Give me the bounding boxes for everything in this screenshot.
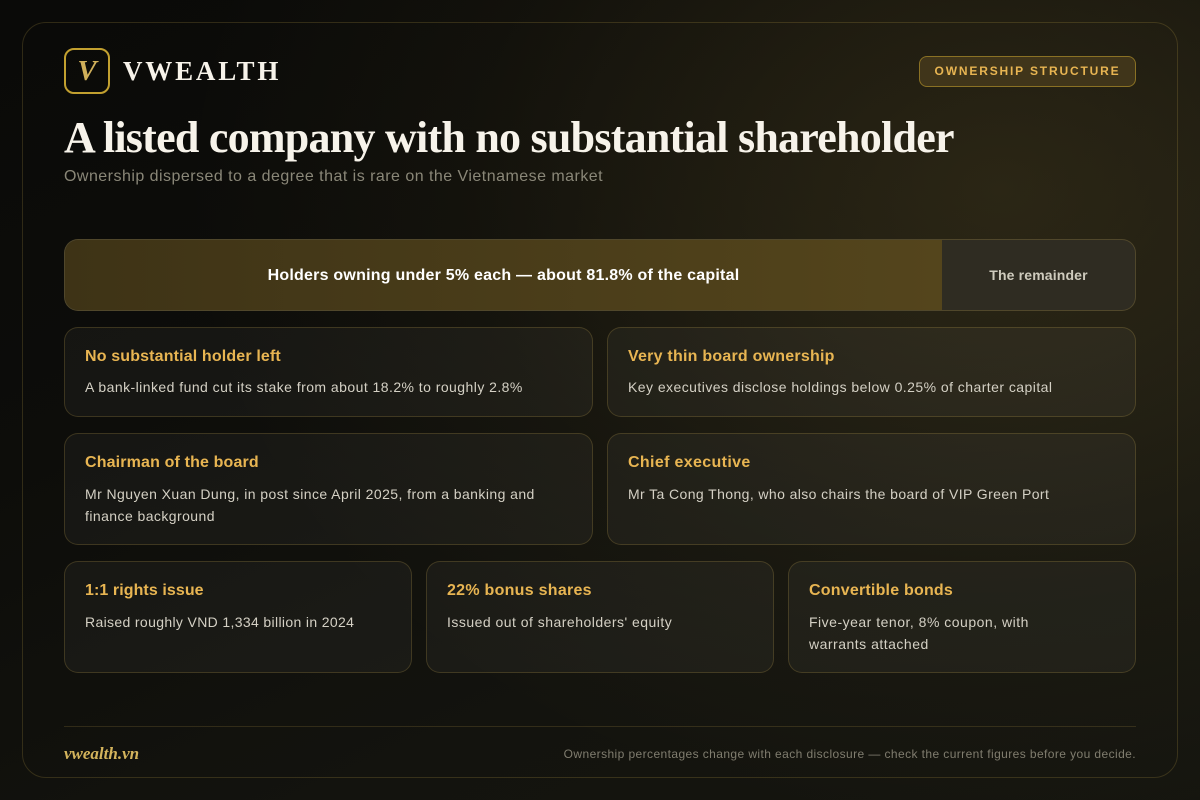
- card: chairman: Mr Nguyen Xuan Dung, in post since April 2025, from a banking and: [85, 486, 535, 502]
- icon: V monogram: [64, 48, 110, 94]
- card: no substantial holder: No substantial holder left: [85, 348, 281, 365]
- card: convertible bonds: Convertible bonds: [809, 582, 953, 599]
- segment: under 5% holders: Holders owning under 5% each — about 81.8% of the capital: [268, 267, 739, 284]
- card: chief executive: [607, 433, 1136, 545]
- badge: ownership structure: OWNERSHIP STRUCTURE: [935, 64, 1120, 78]
- badge: ownership structure: [919, 56, 1136, 87]
- wordmark: VWEALTH: [123, 56, 281, 86]
- brand logo: [64, 48, 281, 94]
- icon: V monogram: V: [77, 55, 97, 87]
- subtitle: Ownership dispersed to a degree that is rare on the Vietnamese market: [64, 168, 603, 185]
- card: convertible bonds: [788, 561, 1136, 673]
- card: bonus shares: Issued out of shareholders' equity: [447, 614, 672, 630]
- card: no substantial holder: A bank-linked fund cut its stake from about 18.2% to roughly 2.8%: [85, 379, 523, 395]
- card: board ownership: [607, 327, 1136, 417]
- card: chief executive: Mr Ta Cong Thong, who also chairs the board of VIP Green Port: [628, 486, 1049, 502]
- card: bonus shares: [426, 561, 774, 673]
- card: convertible bonds: Five-year tenor, 8% coupon, with: [809, 614, 1029, 630]
- card: chief executive: Chief executive: [628, 454, 751, 471]
- footer site: vwealth.vn: [64, 744, 139, 763]
- card: chairman: [64, 433, 593, 545]
- title: A listed company with no substantial shareholder: [64, 113, 954, 162]
- footer disclaimer: Ownership percentages change with each disclosure — check the current figures before you decide.: [564, 747, 1136, 761]
- segment: under 5% holders: [65, 240, 942, 310]
- card: board ownership: Key executives disclose holdings below 0.25% of charter capital: [628, 379, 1052, 395]
- card: convertible bonds: warrants attached: [809, 636, 929, 652]
- card: bonus shares: 22% bonus shares: [447, 582, 592, 599]
- card: rights issue: 1:1 rights issue: [85, 582, 204, 599]
- card: chairman: finance background: [85, 508, 215, 524]
- card: rights issue: Raised roughly VND 1,334 billion in 2024: [85, 614, 354, 630]
- card: rights issue: [64, 561, 412, 673]
- card: board ownership: Very thin board ownership: [628, 348, 835, 365]
- card: no substantial holder: [64, 327, 593, 417]
- ownership bar: [64, 239, 1136, 311]
- segment: remainder: The remainder: [989, 267, 1088, 283]
- card: chairman: Chairman of the board: [85, 454, 259, 471]
